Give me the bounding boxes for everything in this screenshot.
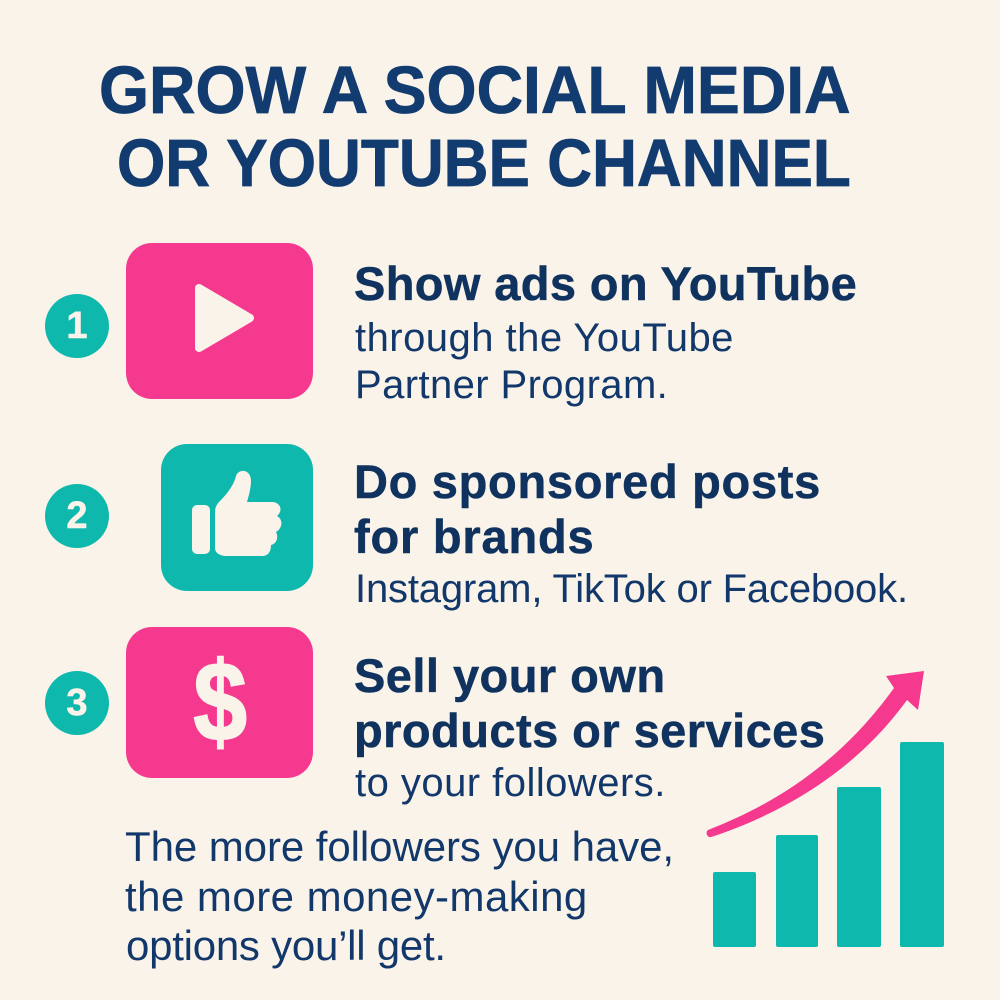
step 2 heading	[354, 455, 821, 563]
step 3 heading	[354, 649, 825, 758]
step 2 heading: for brands	[354, 510, 594, 563]
title: OR YOUTUBE CHANNEL	[117, 126, 851, 201]
icon: thumbs up tile	[161, 444, 313, 591]
icon: dollar tile	[126, 627, 313, 778]
closing text	[125, 823, 674, 969]
step 1 text: through the YouTube	[355, 316, 734, 360]
number badge 2	[45, 484, 109, 548]
number badge 3	[45, 671, 109, 735]
step 1 heading: Show ads on YouTube	[354, 257, 857, 310]
number badge 3: 3	[66, 682, 88, 724]
step 3 heading: products or services	[354, 704, 825, 757]
title	[99, 53, 851, 201]
bars	[713, 742, 944, 947]
closing text: the more money-making	[125, 872, 588, 920]
icon: play tile	[126, 243, 313, 399]
step 1 text: Partner Program.	[355, 363, 668, 407]
step 1 text	[355, 316, 734, 407]
closing text: The more followers you have,	[125, 823, 674, 870]
number badge 1	[45, 294, 109, 358]
closing text: options you’ll get.	[126, 922, 446, 969]
step 2 text: Instagram, TikTok or Facebook.	[355, 567, 908, 611]
growth chart	[706, 671, 944, 947]
step 3 heading: Sell your own	[354, 649, 666, 702]
number badge 1: 1	[66, 305, 88, 347]
icon: dollar tile: $	[194, 639, 247, 764]
step 3 text: to your followers.	[355, 761, 666, 805]
step 2 heading: Do sponsored posts	[354, 455, 821, 508]
number badge 2: 2	[66, 495, 88, 537]
arrow	[707, 671, 924, 837]
title: GROW A SOCIAL MEDIA	[99, 53, 851, 128]
